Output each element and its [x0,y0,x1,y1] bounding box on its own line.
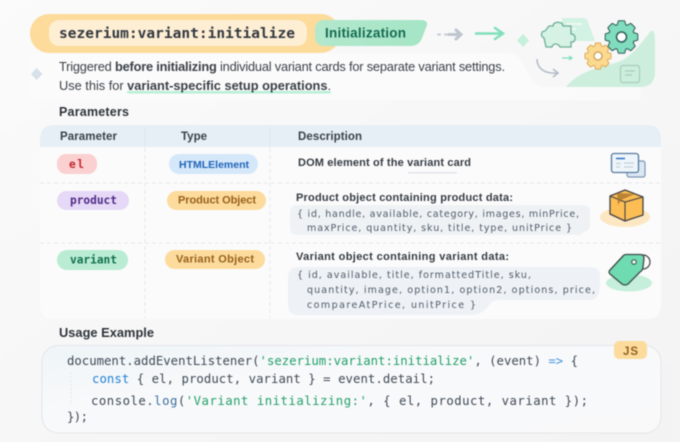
row: el: HTMLElement [179,159,250,171]
teal gear [606,21,637,53]
row: el [57,154,645,177]
illustration: gears and puzzle [537,18,655,87]
row: variant [57,250,652,315]
code lines: document.addEventListener('sezerium:variant:initialize', (event) => { [67,354,578,368]
description panel [30,53,640,100]
header banner [30,14,427,53]
icon: card [612,154,645,177]
row: variant: { id, available, title, formattedTitle, sku, [297,270,531,281]
row: product [57,190,650,235]
table header: Parameter [60,131,118,143]
description text: Triggered before initializing individual variant cards for separate variant settings. [59,59,505,74]
icon: box [600,190,650,227]
initialization tag [315,20,427,46]
table header [40,125,661,147]
row: product: Product Object [178,194,256,206]
description text: Use this for variant-specific setup operations. [59,78,331,93]
curved arrow [537,59,558,77]
event name pill [49,20,307,46]
row: el: DOM element of the variant card [298,157,471,169]
document icon [620,66,640,82]
code block [42,341,661,433]
initialization tag: Initialization [325,26,406,40]
card behind puzzle [560,18,595,41]
JS badge [614,341,647,359]
flow arrows [438,28,503,39]
row: variant: Variant object containing variant data: [296,251,509,263]
row: product: Product object containing product data: [296,192,513,204]
yellow gear [585,43,611,69]
row: el: el [69,158,84,171]
code lines: const { el, product, variant } = event.detail; [92,372,435,386]
code lines: console.log('Variant initializing:', { el, product, variant }); [91,394,588,408]
small diamond [31,68,42,80]
parameters table [40,125,661,319]
table header: Type [181,131,207,143]
JS badge: JS [623,346,638,358]
puzzle icon [541,22,575,47]
decorative diamond [517,34,529,47]
table header: Description [298,131,362,143]
icon: tag [606,254,652,292]
code lines [67,354,588,424]
code lines: }); [67,410,88,424]
usage example heading: Usage Example [59,325,154,340]
row: product: product [70,194,117,207]
row: variant: variant [70,254,117,266]
parameters heading: Parameters [59,105,129,119]
row: product: { id, handle, available, category, images, minPrice, [297,209,579,220]
row: variant: compareAtPrice, unitPrice } [307,300,476,311]
row: variant: Variant Object [176,254,254,266]
row: variant: quantity, image, option1, option2, options, price, [307,285,595,296]
event name pill: sezerium:variant:initialize [59,26,295,42]
row: product: maxPrice, quantity, sku, title, type, unitPrice } [307,223,572,234]
description text [59,59,505,94]
